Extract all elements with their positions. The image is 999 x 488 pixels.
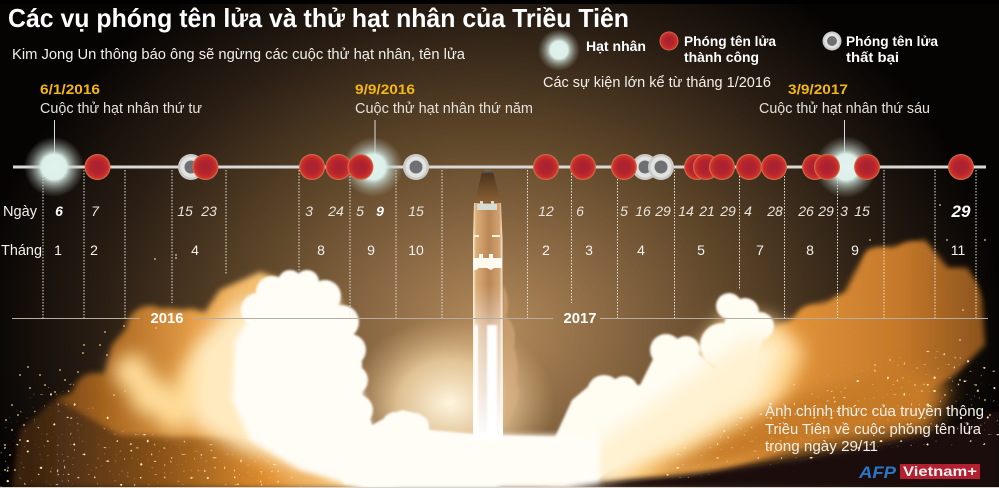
row label: month: Tháng (1, 242, 42, 259)
callout: 3/9/2017: Cuộc thử hạt nhân thứ sáu (759, 100, 930, 117)
ground at bottom right (565, 410, 999, 488)
successful launches (84, 154, 974, 180)
legend: success label: Phóng tên lửa (684, 33, 776, 49)
month numbers: 8 (806, 242, 814, 258)
day numbers: 16 (635, 203, 651, 219)
legend (538, 29, 938, 71)
rocket smoke trail (503, 285, 518, 430)
legend: failure icon (822, 32, 842, 50)
callout: 6/1/2016 (40, 81, 202, 166)
callout: 6/1/2016: Cuộc thử hạt nhân thứ tư (40, 100, 202, 117)
rocket (473, 170, 518, 440)
month numbers: 9 (367, 242, 375, 258)
callout: 9/9/2016: 9/9/2016 (355, 81, 415, 97)
logo: AFP Vietnam+ (858, 463, 980, 482)
day numbers: 15 (177, 203, 193, 219)
month numbers: 2 (542, 242, 550, 258)
day numbers: 4 (744, 203, 752, 219)
month numbers (54, 242, 965, 258)
nuclear tests (24, 136, 877, 198)
legend: nuclear label: Hạt nhân (586, 38, 646, 54)
day numbers: 29 (951, 202, 971, 221)
callout: 9/9/2016: Cuộc thử hạt nhân thứ năm (355, 100, 533, 117)
rocket body (473, 203, 502, 432)
flame glow at the pad (360, 435, 600, 488)
day numbers: 5 (356, 203, 364, 219)
month numbers: 4 (637, 242, 645, 258)
day numbers: 15 (408, 203, 424, 219)
callout: 9/9/2016 (355, 81, 533, 166)
day numbers: 9 (376, 203, 384, 219)
day numbers: 7 (91, 203, 100, 219)
day numbers: 15 (854, 203, 870, 219)
year 2016: 2016 (150, 310, 184, 327)
subtitle: Kim Jong Un thông báo ông sẽ ngừng các cuộc thử hạt nhân, tên lửa (12, 46, 466, 63)
day numbers: 6 (576, 203, 584, 219)
day numbers: 23 (200, 203, 217, 219)
day numbers: 26 (797, 203, 814, 219)
photo caption: trong ngày 29/11 (765, 438, 878, 455)
day numbers: 29 (719, 203, 736, 219)
callout: 3/9/2017: 3/9/2017 (788, 81, 848, 97)
sky glow above the launch pad (345, 318, 555, 488)
day numbers: 28 (766, 203, 783, 219)
legend: nuclear icon (538, 29, 580, 71)
photo caption: Triều Tiên về cuộc phóng tên lửa (765, 421, 982, 438)
month dividers (43, 170, 976, 318)
sparks: left (0, 384, 302, 487)
day numbers: 5 (620, 203, 628, 219)
year 2017: 2017 (564, 310, 596, 327)
month numbers: 4 (191, 242, 199, 258)
day numbers: 21 (698, 203, 715, 219)
legend: thất bại (846, 49, 899, 65)
day numbers: 14 (678, 203, 694, 219)
day numbers: 29 (654, 203, 671, 219)
day numbers: 24 (327, 203, 344, 219)
month numbers: 5 (697, 242, 705, 258)
legend: thành công (684, 49, 759, 65)
day numbers: 3 (840, 203, 848, 219)
legend: failure label: Phóng tên lửa (846, 33, 938, 49)
day numbers: 3 (305, 203, 313, 219)
sparks: right (649, 350, 999, 478)
year axis (12, 310, 988, 327)
callout: 3/9/2017 (759, 81, 930, 166)
exhaust cloud: right (480, 240, 985, 484)
month numbers: 11 (951, 242, 965, 258)
month numbers: 3 (585, 242, 593, 258)
rocket lower glow (473, 285, 503, 440)
month numbers: 2 (90, 242, 98, 258)
month numbers: 9 (851, 242, 859, 258)
title: Các vụ phóng tên lửa và thử hạt nhân của Triều Tiên (8, 3, 629, 33)
callout: 6/1/2016: 6/1/2016 (40, 81, 100, 97)
scattered sparks (5, 205, 990, 470)
events note: Các sự kiện lớn kể từ tháng 1/2016 (543, 74, 771, 91)
day numbers: 6 (55, 203, 63, 219)
month numbers: 10 (408, 242, 424, 258)
rocket nose (475, 170, 501, 202)
logo: AFP Vietnam+: AFP (858, 463, 897, 482)
failed launches (178, 154, 674, 180)
exhaust cloud: left (12, 270, 500, 488)
day numbers (55, 202, 971, 221)
month numbers: 7 (756, 242, 764, 258)
photo caption: Ảnh chính thức của truyền thông (765, 403, 984, 420)
timeline (13, 136, 986, 198)
photo caption (765, 403, 984, 455)
lower flame orange (640, 370, 950, 482)
month numbers: 1 (54, 242, 62, 258)
row label: day: Ngày (3, 203, 37, 220)
day numbers: 29 (817, 203, 834, 219)
bottom edge (0, 487, 999, 488)
day numbers: 12 (538, 203, 554, 219)
month numbers: 8 (317, 242, 325, 258)
legend: success icon (660, 32, 678, 50)
rocket white band (473, 254, 502, 270)
logo: AFP Vietnam+: Vietnam+ (903, 463, 977, 479)
